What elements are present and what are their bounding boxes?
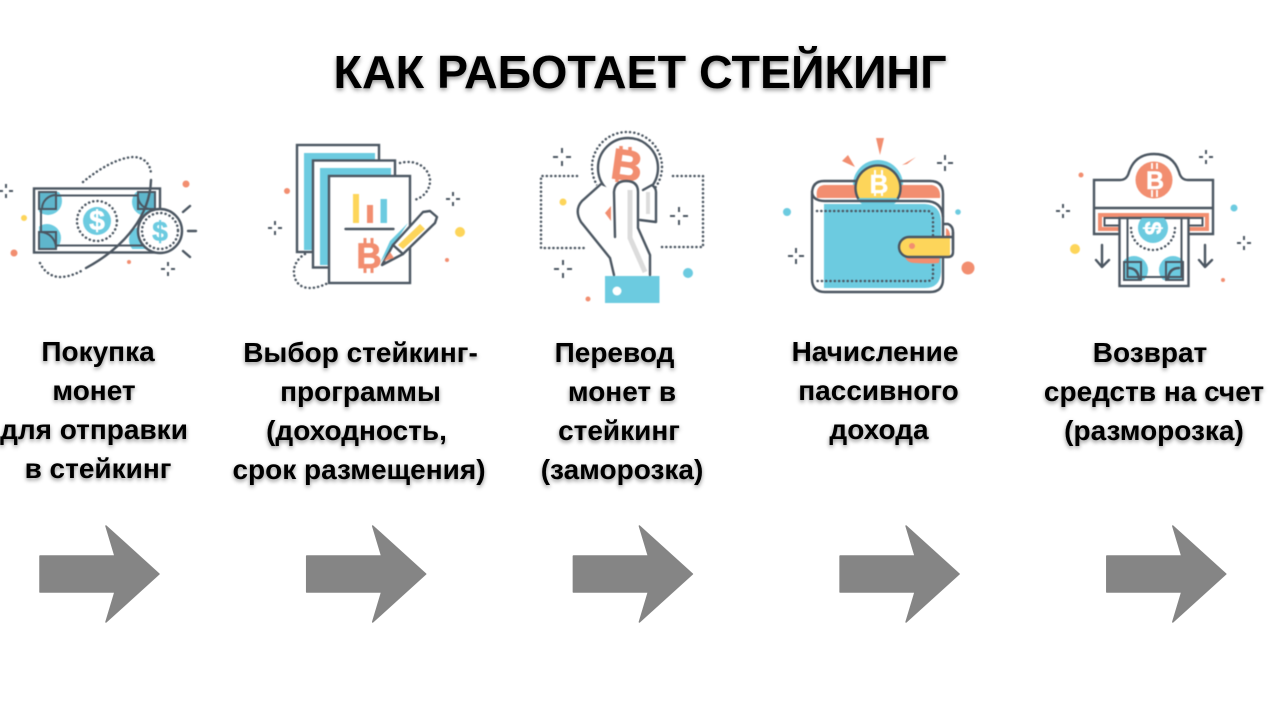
icon: ATM dispensing cash bbox=[1056, 150, 1251, 286]
step 2 text bbox=[231, 337, 487, 490]
arrow 5 bbox=[1107, 526, 1226, 622]
icon: ATM dispensing cash: B bbox=[1146, 167, 1164, 195]
step 5 text: средств на счет bbox=[1044, 376, 1264, 407]
icon: hand holding bitcoin bbox=[541, 132, 703, 303]
step 4 text: пассивного bbox=[798, 375, 959, 406]
icon: wallet with bitcoin coin bbox=[783, 138, 974, 292]
icon: banknote and coin bbox=[0, 157, 196, 277]
step 2 text: Выбор стейкинг- bbox=[243, 337, 478, 368]
icon: hand holding bitcoin: B bbox=[608, 140, 646, 192]
arrow 4 bbox=[840, 526, 959, 622]
step 1 text: в стейкинг bbox=[25, 453, 171, 484]
step 1 text: монет bbox=[52, 375, 136, 406]
icon: banknote and coin: $ bbox=[89, 205, 105, 236]
icon: banknote and coin: $ bbox=[152, 216, 168, 247]
step 5 text bbox=[1042, 337, 1266, 450]
step 3 text: стейкинг bbox=[558, 415, 680, 446]
arrow 1 bbox=[40, 526, 159, 622]
icon: documents with chart and pencil: B bbox=[356, 237, 382, 276]
step 3 text bbox=[539, 337, 705, 490]
step 1 text: для отправки bbox=[0, 414, 188, 445]
icon: ATM dispensing cash: $ bbox=[1139, 221, 1166, 235]
step 2 text: программы bbox=[280, 376, 441, 407]
step 2 text: (доходность, bbox=[266, 415, 447, 446]
step 1 text: Покупка bbox=[41, 336, 155, 367]
step 5 text: Возврат bbox=[1093, 337, 1207, 368]
step 3 text: (заморозка) bbox=[541, 454, 703, 485]
step 3 text: монет в bbox=[568, 376, 676, 407]
icon: wallet with bitcoin coin: B bbox=[870, 169, 888, 199]
step 4 text: дохода bbox=[829, 414, 929, 445]
step 1 text bbox=[0, 336, 189, 484]
step 5 text: (разморозка) bbox=[1064, 415, 1244, 446]
icon: documents with chart and pencil bbox=[268, 145, 465, 288]
arrow 2 bbox=[307, 526, 426, 622]
step 3 text: Перевод bbox=[555, 337, 674, 368]
step 4 text: Начисление bbox=[792, 336, 958, 367]
title: КАК РАБОТАЕТ СТЕЙКИНГ bbox=[334, 46, 946, 98]
arrow 3 bbox=[573, 526, 692, 622]
step 2 text: срок размещения) bbox=[232, 454, 486, 485]
step 4 text bbox=[790, 336, 960, 450]
